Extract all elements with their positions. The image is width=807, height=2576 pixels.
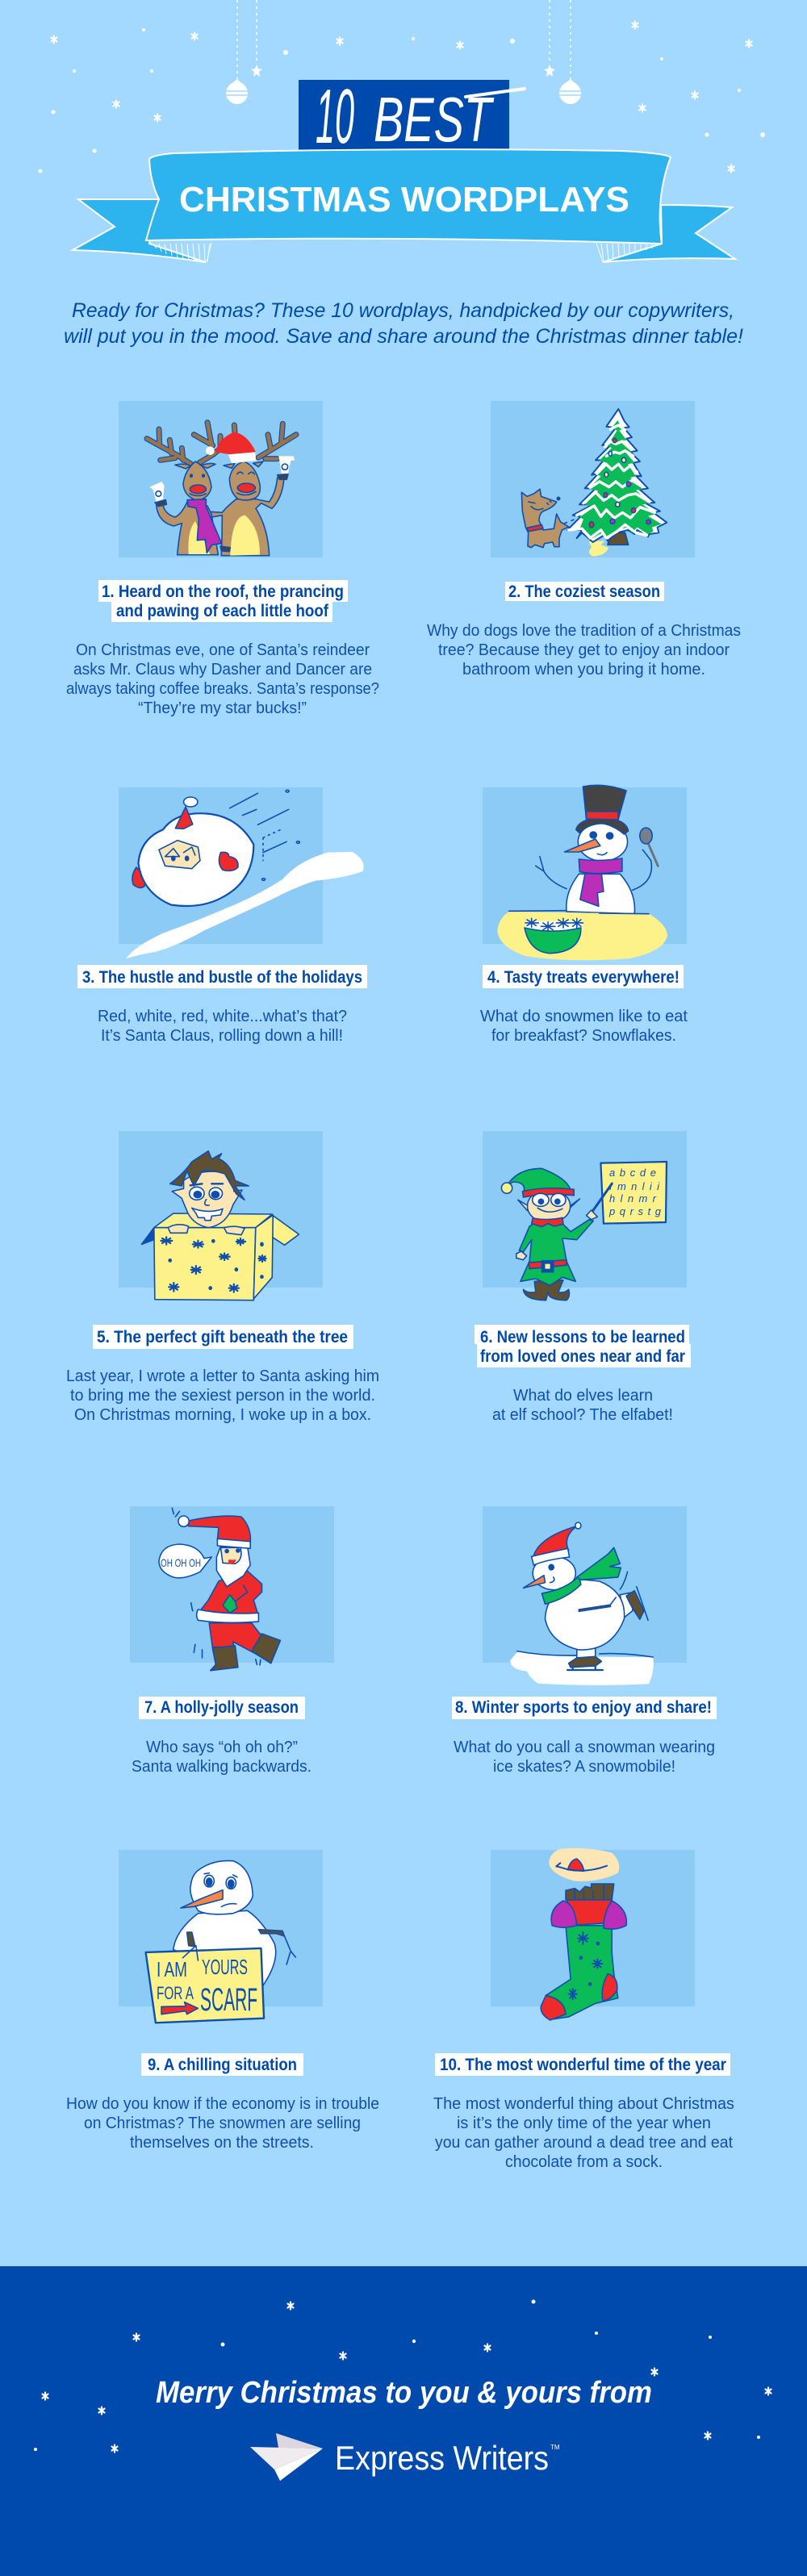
heading 4: 4. Tasty treats everywhere! (487, 968, 679, 987)
body 10: chocolate from a sock. (505, 2152, 663, 2171)
panel: wordplay 9 (66, 1850, 379, 2152)
logo: express writers: Express Writers (335, 2439, 549, 2477)
body 5: On Christmas morning, I woke up in a box. (74, 1405, 371, 1424)
alphabet chart letters: f m n l i i (609, 1180, 660, 1192)
body 10: you can gather around a dead tree and eat (435, 2133, 733, 2152)
body 4 (480, 1007, 688, 1045)
panel: wordplay 7 (130, 1506, 334, 1776)
body 10: is it’s the only time of the year when (457, 2114, 711, 2132)
heading 7: 7. A holly-jolly season (144, 1698, 299, 1717)
body 2: bathroom when you bring it home. (462, 660, 705, 678)
heading 3: 3. The hustle and bustle of the holidays (82, 968, 362, 987)
body 4: for breakfast? Snowflakes. (491, 1026, 676, 1045)
illustration: reindeer (147, 423, 296, 556)
body 1: “They’re my star bucks!” (138, 699, 307, 717)
panel: wordplay 4 (480, 785, 688, 1045)
body 5: to bring me the sexiest person in the world. (70, 1386, 375, 1405)
body 3 (98, 1007, 347, 1045)
body 6: What do elves learn (513, 1386, 653, 1405)
heading 2: 2. The coziest season (508, 582, 660, 601)
sign text: YOURS (202, 1955, 248, 1979)
body 9: themselves on the streets. (130, 2133, 314, 2152)
heading 6 (475, 1325, 691, 1367)
intro text: Ready for Christmas? These 10 wordplays, handpicked by our copywriters, (72, 299, 734, 322)
sign text: SCARF (200, 1982, 257, 2018)
panel: wordplay 5 (66, 1131, 379, 1424)
illustration: snowman with sign (146, 1860, 295, 2023)
heading 5: 5. The perfect gift beneath the tree (97, 1328, 348, 1346)
illustration: elf with alphabet chart (501, 1162, 667, 1301)
body 5: Last year, I wrote a letter to Santa asking him (66, 1367, 379, 1385)
body 5 (66, 1367, 379, 1424)
body 8: ice skates? A snowmobile! (493, 1757, 675, 1776)
body 8 (454, 1738, 715, 1776)
heading 1 (98, 580, 348, 622)
panel: wordplay 8 (452, 1506, 717, 1776)
body 1: On Christmas eve, one of Santa’s reindeer (76, 641, 370, 659)
alphabet chart letters: p q r s t g (608, 1205, 662, 1217)
body 3: It’s Santa Claus, rolling down a hill! (101, 1026, 343, 1045)
alphabet chart letters (608, 1167, 662, 1217)
heading 9: 9. A chilling situation (148, 2056, 297, 2074)
body 7 (132, 1738, 312, 1776)
body 8: What do you call a snowman wearing (454, 1738, 715, 1756)
heading 6: 6. New lessons to be learned (480, 1328, 685, 1346)
illustration: snowman ice skating (510, 1522, 654, 1685)
ribbon banner (73, 149, 735, 262)
sign text: FOR A (157, 1983, 194, 2003)
sign text: I AM (157, 1957, 187, 1981)
body 2: Why do dogs love the tradition of a Christmas (427, 621, 741, 640)
body 7: Santa walking backwards. (132, 1757, 312, 1776)
panel: wordplay 6 (475, 1131, 691, 1424)
header snow (39, 21, 765, 173)
body 6 (492, 1386, 673, 1424)
illustration: stocking with chocolate (541, 1848, 626, 2020)
body 2: tree? Because they get to enjoy an indoor (438, 641, 730, 659)
illustration: person in a box (142, 1151, 299, 1301)
body 3: Red, white, red, white...what’s that? (98, 1007, 347, 1025)
panel: wordplay 1 (66, 401, 379, 717)
body 7: Who says “oh oh oh?” (146, 1738, 298, 1756)
panel: wordplay 10 (433, 1848, 734, 2171)
title: 10 best: 10 (316, 73, 354, 160)
intro text (64, 299, 743, 348)
ribbon banner: CHRISTMAS WORDPLAYS (179, 180, 629, 219)
body 4: What do snowmen like to eat (480, 1007, 688, 1025)
illustration: dog and tree (521, 409, 667, 557)
heading 1: and pawing of each little hoof (116, 602, 329, 620)
panel: wordplay 3 (77, 787, 367, 1045)
body 1: asks Mr. Claus why Dasher and Dancer are (73, 660, 372, 678)
body 9 (66, 2094, 379, 2152)
footer message: Merry Christmas to you & yours from (156, 2376, 652, 2410)
title: 10 best: BEST (374, 84, 495, 155)
heading 6: from loved ones near and far (480, 1347, 685, 1366)
speech bubble text: OH OH OH (161, 1556, 201, 1569)
alphabet chart letters: h l n m r (609, 1192, 657, 1204)
logo: express writers (250, 2433, 560, 2481)
title: 10 best (299, 73, 525, 160)
alphabet chart letters: a b c d e (609, 1167, 656, 1179)
body 9: How do you know if the economy is in trouble (66, 2094, 379, 2113)
heading 10: 10. The most wonderful time of the year (440, 2056, 726, 2074)
illustration: santa rolling downhill (126, 790, 364, 958)
body 1 (66, 641, 379, 717)
panel: wordplay 2 (427, 401, 741, 678)
body 10 (433, 2094, 734, 2171)
footer snow (34, 2299, 771, 2453)
intro text: will put you in the mood. Save and share around the Christmas dinner table! (64, 325, 743, 348)
body 10: The most wonderful thing about Christmas (433, 2094, 734, 2113)
illustration: santa walking backwards (159, 1508, 280, 1671)
body 6: at elf school? The elfabet! (492, 1405, 673, 1424)
illustration: snowman with cereal bowl (497, 785, 667, 960)
body 9: on Christmas? The snowmen are selling (84, 2114, 361, 2132)
body 2 (427, 621, 741, 678)
body 1: always taking coffee breaks. Santa’s response? (66, 679, 379, 698)
footer band (0, 2266, 807, 2576)
heading 1: 1. Heard on the roof, the prancing (102, 582, 344, 601)
logo: express writers: TM (550, 2444, 560, 2451)
hanging ornaments (225, 0, 582, 104)
heading 8: 8. Winter sports to enjoy and share! (455, 1698, 712, 1717)
sign text (157, 1955, 257, 2018)
